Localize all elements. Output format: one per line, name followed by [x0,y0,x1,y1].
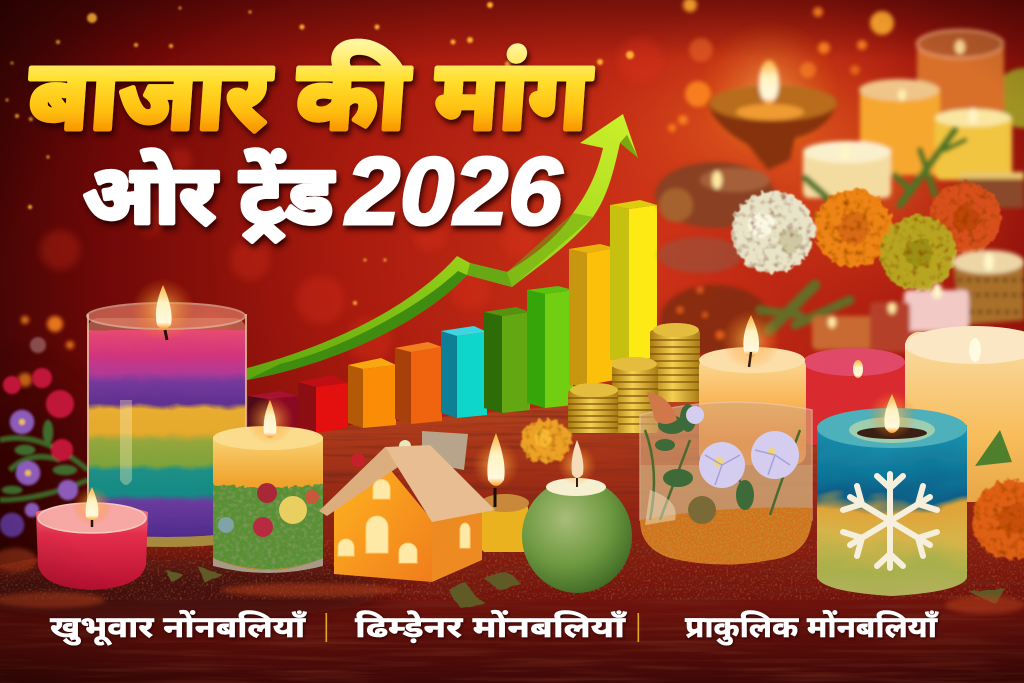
arrow: green rising trend [247,114,638,380]
bar 2 red [298,375,348,433]
candle: small red votive [36,486,148,590]
lilac flowers [686,406,799,488]
candle: ornate pot [952,250,1024,325]
candle: cream pillar at right edge [905,326,1024,502]
title: white heading line: ओर ट्रेंड [83,149,334,242]
windows [338,480,470,563]
label: second candle category: ढिम्ड़ेनर मोंनबलियाँ [355,609,627,644]
glass jar candle: pressed flowers with orange sand [640,392,812,565]
title: yellow heading: बाजार की मांग [26,40,595,150]
bar 9 yellow [610,200,657,360]
mid right: small candles and foliage [660,250,1024,355]
decoration: gift box behind house [351,431,468,470]
candle: yellow [935,108,1012,180]
candle: round green [522,440,632,593]
foliage [805,130,965,205]
bar 3 orange [348,358,396,428]
marigold: bottom right with leaves [972,430,1024,560]
diya: brass oil lamp [708,60,838,170]
bar 4 orange-red [395,342,442,424]
bar 1 dark red [248,391,298,430]
ring: gold beaded bowl [960,172,1024,208]
candle: small copper [812,302,910,352]
candle: pink [904,283,969,332]
bar 7 bright green [527,286,573,408]
flower: yellow-green at edge [994,68,1024,128]
title: white heading line [83,138,563,245]
label: first candle category: खुभूवार नोंनबलियाँ [50,609,307,646]
marigold flowers: upper right [732,182,1001,291]
title: white heading line: 2026 [344,138,563,245]
candle: big layered glass jar [80,278,255,547]
house-shaped candle: glowing [319,445,495,582]
label: third candle category: प्राकुलिक मोंनबलियाँ [685,609,939,646]
scattered leaves and spices [0,548,1024,614]
bar 5 teal [441,326,487,418]
coins: gold stacks [568,323,700,433]
bar 6 green [484,307,530,413]
candle: red pillar [803,348,905,445]
pressed leaves [655,404,754,524]
candle: cream [803,141,891,198]
candle: orange pillar behind glass [699,310,806,465]
upper right: diya and candle cluster [655,20,1024,273]
bar chart: rising 3D bars [248,200,657,433]
pressed flowers [218,483,319,537]
candle: botanical pillar [205,396,331,590]
candle: amber [859,79,940,175]
candle: yellow behind house [472,433,529,552]
icon: snowflake [843,474,937,568]
marigold: small on table [520,419,572,463]
label dividers [326,613,639,642]
candle: tall orange [917,30,1004,122]
dish: brown decorated plate [655,162,775,273]
table: red wooden surface [0,390,1024,683]
candle: teal with snowflake [817,394,967,596]
bar 8 amber [569,244,615,385]
floral garland: left side [0,337,130,600]
